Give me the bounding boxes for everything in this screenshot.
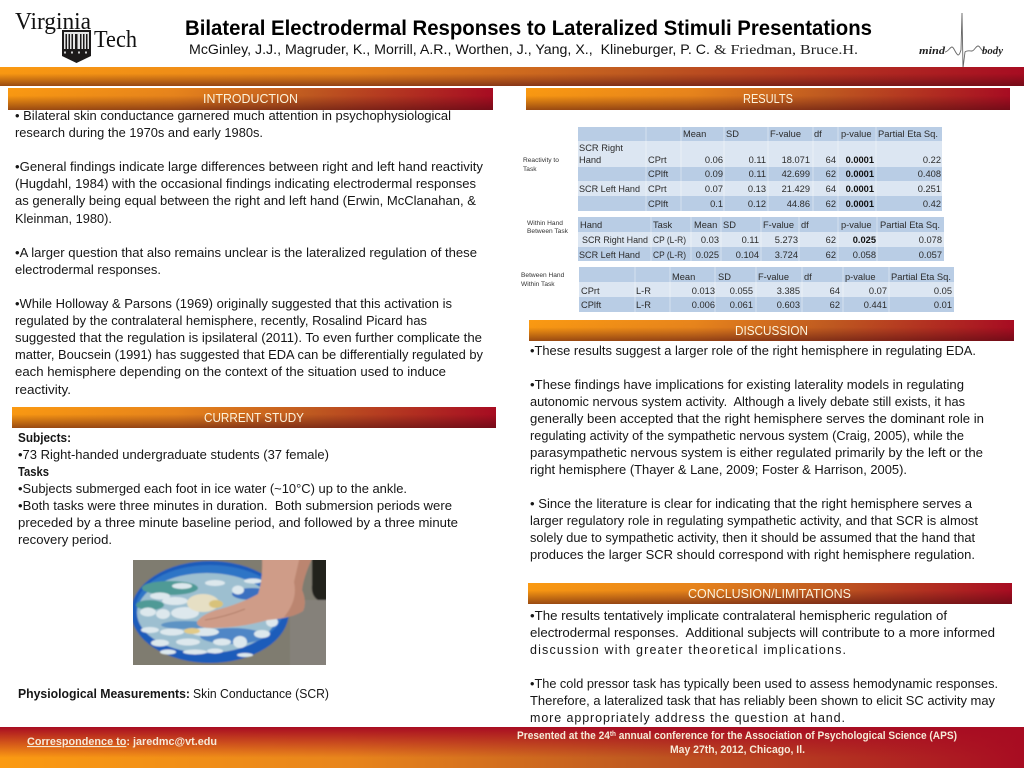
table: reactivity to task: 0.0001 xyxy=(846,184,874,194)
text: introduction body: Kleinman, 1980). xyxy=(15,212,112,226)
text: correspondence: Correspondence to: jaredmc@vt.edu xyxy=(27,736,217,748)
label: within hand between task xyxy=(527,220,569,235)
table: reactivity to task: 0.0001 xyxy=(846,199,874,209)
heading: conclusion and limitations: CONCLUSION/LIMITATIONS xyxy=(688,587,851,601)
table: between hand within task: p-value xyxy=(845,272,876,282)
table: reactivity to task: 21.429 xyxy=(782,184,810,194)
table: within hand between task: Mean xyxy=(694,220,717,230)
text: subjects and tasks: •Subjects submerged each foot in ice water (~10°C) up to the ankle. xyxy=(18,482,407,496)
label: reactivity to task xyxy=(523,157,559,173)
logo: Virginia Tech xyxy=(15,9,137,63)
photo: foot in ice water basin xyxy=(130,556,330,668)
logo: mind body heartbeat: mind xyxy=(919,45,946,57)
text: conclusion body: more appropriately address the question at hand. xyxy=(530,711,845,725)
text: conference details xyxy=(517,730,957,756)
text: subjects and tasks: Tasks xyxy=(18,465,49,479)
table: within hand between task: 0.078 xyxy=(919,235,942,245)
table: between hand within task: 0.006 xyxy=(692,300,715,310)
table: within hand between task: 3.724 xyxy=(775,250,798,260)
text: introduction body: (Hugdahl, 1984) with the occasional findings indicating electrodermal responses xyxy=(15,177,476,191)
footer banner xyxy=(0,727,1024,768)
table: within hand between task: SCR Left Hand xyxy=(579,250,640,260)
table: within hand between task: df xyxy=(801,220,809,230)
title: Bilateral Electrodermal Responses to Lateralized Stimuli Presentations xyxy=(185,17,872,40)
text: physiological measurements: Physiological Measurements: xyxy=(18,687,190,701)
panel: conclusion and limitations xyxy=(528,583,1012,725)
label: between hand within task: Between Hand xyxy=(521,272,565,279)
text: subjects and tasks: preceded by a three minute baseline period, and followed by a three minute xyxy=(18,516,458,530)
label: between hand within task xyxy=(521,272,565,288)
table: reactivity to task: p-value xyxy=(841,129,872,139)
heading: introduction xyxy=(8,88,493,110)
text: introduction body: •A larger question that also remains unclear is the lateralized regulation of these xyxy=(15,246,477,260)
logo: Virginia Tech: Virginia xyxy=(15,9,91,35)
text: subjects and tasks: •Both tasks were three minutes in duration. Both submersion periods were xyxy=(18,499,452,513)
panel: results xyxy=(521,88,1010,312)
text: introduction body: matter, Boucsein (1991) has suggested that EDA can be differentially regulated by xyxy=(15,348,484,362)
table: within hand between task: 0.025 xyxy=(696,250,719,260)
text: introduction body: suggested that the regulation is ipsilateral (2011). To even further complicate the xyxy=(15,331,482,345)
table: between hand within task: L-R xyxy=(636,300,651,310)
table: reactivity to task: Mean xyxy=(683,129,706,139)
table: reactivity to task: SCR Left Hand xyxy=(579,184,640,194)
table: reactivity to task: 62 xyxy=(826,199,836,209)
table: reactivity to task: CPrt xyxy=(648,155,667,165)
table: between hand within task: SD xyxy=(718,272,731,282)
text: subjects and tasks xyxy=(18,431,458,547)
table: within hand between task: Partial Eta Sq. xyxy=(880,220,940,230)
heading: discussion xyxy=(529,320,1014,341)
label: reactivity to task: Task xyxy=(523,166,537,173)
table: reactivity to task: 64 xyxy=(826,184,836,194)
table: reactivity to task: 62 xyxy=(826,169,836,179)
text: introduction body: reactivity. xyxy=(15,383,71,397)
text: conclusion body xyxy=(530,609,998,725)
logo: mind body heartbeat xyxy=(919,13,1003,68)
text: introduction body: electrodermal responses. xyxy=(15,263,161,277)
text: subjects and tasks: •73 Right-handed undergraduate students (37 female) xyxy=(18,448,329,462)
table: within hand between task: 0.058 xyxy=(853,250,876,260)
logo: mind body heartbeat: body xyxy=(982,45,1003,57)
table: reactivity to task: 0.06 xyxy=(705,155,723,165)
table: within hand between task: Task xyxy=(653,220,672,230)
table: reactivity to task: 0.13 xyxy=(748,184,766,194)
text: subjects and tasks: Subjects: xyxy=(18,431,71,445)
table: reactivity to task: Partial Eta Sq. xyxy=(878,129,938,139)
text: discussion body xyxy=(530,344,984,562)
text: conclusion body: •The results tentatively implicate contralateral hemispheric regulation of xyxy=(530,609,948,623)
text: conference details: May 27th, 2012, Chicago, Il. xyxy=(670,744,805,756)
table: reactivity to task: 0.09 xyxy=(705,169,723,179)
authors: & Friedman, Bruce.H. xyxy=(714,43,858,58)
table: between hand within task: 0.07 xyxy=(869,286,887,296)
table: reactivity to task: 0.12 xyxy=(748,199,766,209)
table: reactivity to task: 0.0001 xyxy=(846,155,874,165)
text: discussion body: right hemisphere (Thayer & Lane, 2009; Foster & Harrison, 2005). xyxy=(530,463,907,477)
table: within hand between task: 0.104 xyxy=(736,250,759,260)
text: introduction body: regulated by the contralateral hemisphere, recently, Rosalind Picard has xyxy=(15,314,427,328)
heading: results: RESULTS xyxy=(743,92,793,106)
text: discussion body: larger regulatory role in regulating sympathetic activity, and that SCR is almost xyxy=(530,514,979,528)
heading: current study xyxy=(12,407,496,428)
text: conclusion body: •The cold pressor task has typically been used to assess hemodynamic responses. xyxy=(530,677,998,691)
text: physiological measurements xyxy=(18,687,329,701)
panel: discussion xyxy=(529,320,1014,562)
text: discussion body: •These findings have implications for existing laterality models in regulating xyxy=(530,378,964,392)
table: reactivity to task: 0.251 xyxy=(918,184,941,194)
table: within hand between task: SD xyxy=(723,220,736,230)
text: introduction body: research during the 1970s and early 1980s. xyxy=(15,126,263,140)
table: reactivity to task: 0.11 xyxy=(749,155,766,165)
table: reactivity to task: Hand xyxy=(579,155,601,165)
table: between hand within task: 0.603 xyxy=(777,300,800,310)
table: between hand within task: 3.385 xyxy=(777,286,800,296)
heading: discussion: DISCUSSION xyxy=(735,324,808,338)
table: between hand within task: 0.441 xyxy=(864,300,887,310)
heading: conclusion and limitations xyxy=(528,583,1012,604)
table: reactivity to task: SD xyxy=(726,129,739,139)
table: between hand within task: 64 xyxy=(830,286,840,296)
heading: introduction: INTRODUCTION xyxy=(203,92,298,106)
text: introduction body xyxy=(15,109,484,397)
text: conclusion body: electrodermal responses. Additional subjects will contribute to a more informed xyxy=(530,626,995,640)
text: introduction body: • Bilateral skin conductance garnered much attention in psychophysiological xyxy=(15,109,451,123)
table: between hand within task: 0.013 xyxy=(692,286,715,296)
table: between hand within task xyxy=(579,267,954,312)
table: within hand between task: CP (L-R) xyxy=(653,250,686,260)
table: between hand within task: df xyxy=(804,272,812,282)
text: physiological measurements: Skin Conductance (SCR) xyxy=(193,687,329,701)
text: discussion body: parasympathetic nervous system is either regulated primarily by the left or the xyxy=(530,446,983,460)
table: reactivity to task: F-value xyxy=(770,129,801,139)
text: conclusion body: discussion with greater theoretical implications. xyxy=(530,643,846,657)
table: between hand within task: 0.055 xyxy=(730,286,753,296)
text: subjects and tasks: recovery period. xyxy=(18,533,112,547)
table: between hand within task: CPlft xyxy=(581,300,602,310)
table: within hand between task: F-value xyxy=(763,220,794,230)
table: within hand between task: 62 xyxy=(826,235,836,245)
table: within hand between task: 0.057 xyxy=(919,250,942,260)
table: reactivity to task: CPrt xyxy=(648,184,667,194)
table: between hand within task: Mean xyxy=(672,272,695,282)
heading: results xyxy=(526,88,1010,110)
text: discussion body: solely due to sympathetic activity, then it should be assumed that the hand that xyxy=(530,531,976,545)
table: within hand between task: CP (L-R) xyxy=(653,235,686,245)
text: conference details: annual conference for the Association of Psychological Science (APS) xyxy=(616,730,957,742)
text: introduction body: •While Holloway & Parsons (1969) originally suggested that this activation is xyxy=(15,297,452,311)
table: between hand within task: 62 xyxy=(830,300,840,310)
text: discussion body: • Since the literature is clear for indicating that the right hemisphere serves a xyxy=(530,497,972,511)
label: between hand within task: Within Task xyxy=(521,281,555,288)
table: reactivity to task: 0.408 xyxy=(918,169,941,179)
label: within hand between task: Between Task xyxy=(527,228,569,235)
table: within hand between task: 62 xyxy=(826,250,836,260)
table: reactivity to task: 42.699 xyxy=(782,169,810,179)
table: within hand between task: Hand xyxy=(580,220,602,230)
table: between hand within task: Partial Eta Sq. xyxy=(891,272,951,282)
table: reactivity to task: SCR Right xyxy=(579,143,623,153)
text: introduction body: as generally being equal between the right and left hand (Erwin, McClanahan, & xyxy=(15,194,477,208)
panel: introduction xyxy=(8,88,493,397)
table: reactivity to task: df xyxy=(814,129,822,139)
table: reactivity to task: 0.42 xyxy=(923,199,941,209)
table: reactivity to task: CPlft xyxy=(648,199,669,209)
table: between hand within task: L-R xyxy=(636,286,651,296)
table: within hand between task: 0.03 xyxy=(701,235,719,245)
text: conclusion body: Therefore, a lateralized task that has reliably been shown to elicit SC activity may xyxy=(530,694,996,708)
text: discussion body: generally been accepted that the right hemisphere serves the dominant role in xyxy=(530,412,984,426)
table: within hand between task: 0.11 xyxy=(742,235,759,245)
table: within hand between task: 5.273 xyxy=(775,235,798,245)
table: between hand within task: CPrt xyxy=(581,286,600,296)
table: reactivity to task: CPlft xyxy=(648,169,669,179)
table: reactivity to task: 0.0001 xyxy=(846,169,874,179)
table: within hand between task: SCR Right Hand xyxy=(582,235,648,245)
text: introduction body: •General findings indicate large differences between right and left hand reactivity xyxy=(15,160,484,174)
table: reactivity to task: 18.071 xyxy=(782,155,810,165)
table: reactivity to task xyxy=(578,127,942,211)
label: reactivity to task: Reactivity to xyxy=(523,157,559,164)
table: between hand within task: 0.05 xyxy=(934,286,952,296)
panel: current study xyxy=(12,407,496,701)
table: reactivity to task: 0.22 xyxy=(923,155,941,165)
table: between hand within task: F-value xyxy=(758,272,789,282)
heading: current study: CURRENT STUDY xyxy=(204,411,305,425)
text: conference details: th xyxy=(610,731,616,738)
logo: Virginia Tech: Tech xyxy=(94,27,137,53)
table: within hand between task: 0.025 xyxy=(853,235,876,245)
authors: McGinley, J.J., Magruder, K., Morrill, A.R., Worthen, J., Yang, X., Klineburger, P. C. xyxy=(189,41,710,57)
table: reactivity to task: 0.1 xyxy=(710,199,723,209)
table: within hand between task: p-value xyxy=(841,220,872,230)
top banner xyxy=(0,67,1024,86)
table: reactivity to task: 64 xyxy=(826,155,836,165)
table: between hand within task: 0.01 xyxy=(934,300,952,310)
table: reactivity to task: 0.07 xyxy=(705,184,723,194)
text: conference details: Presented at the 24 xyxy=(517,730,618,742)
text: discussion body: •These results suggest a larger role of the right hemisphere in regulating EDA. xyxy=(530,344,976,358)
table: reactivity to task: 44.86 xyxy=(787,199,810,209)
text: discussion body: produces the larger SCR should correspond with right hemisphere regulation. xyxy=(530,548,975,562)
table: between hand within task: 0.061 xyxy=(730,300,753,310)
text: introduction body: each hemisphere depending on the context of the situation used to induce xyxy=(15,365,446,379)
text: discussion body: autonomic nervous system activity. Although a lively debate still exists, it has xyxy=(530,395,965,409)
table: within hand between task xyxy=(578,217,944,261)
label: within hand between task: Within Hand xyxy=(527,220,563,227)
text: discussion body: regulating activity of the sympathetic nervous system (Craig, 2005), while the xyxy=(530,429,964,443)
table: reactivity to task: 0.11 xyxy=(749,169,766,179)
